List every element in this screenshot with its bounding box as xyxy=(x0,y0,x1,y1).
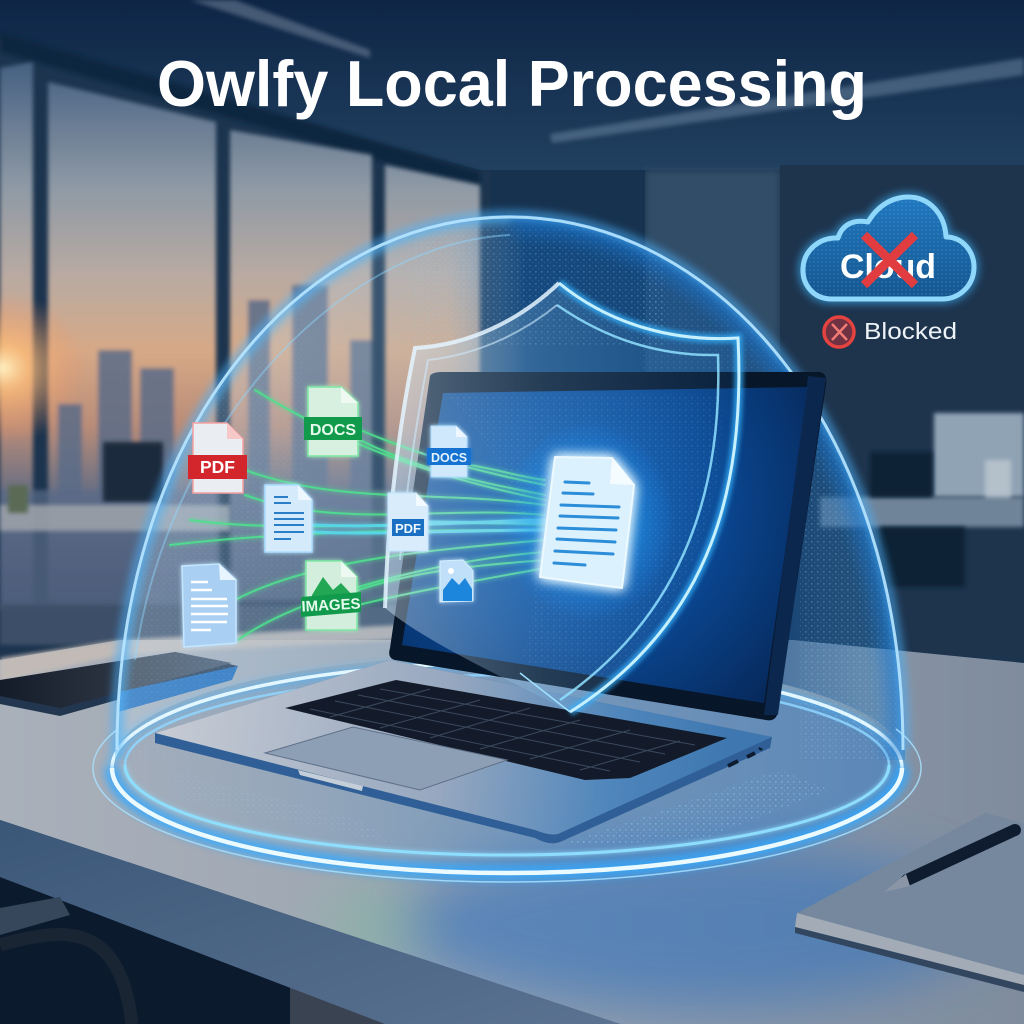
blocked status label xyxy=(824,317,957,347)
side ports xyxy=(728,748,761,766)
laptop xyxy=(155,372,826,843)
shield xyxy=(385,283,739,712)
blocked cloud icon xyxy=(803,197,974,299)
laptop base xyxy=(155,660,772,843)
data streams xyxy=(170,390,548,640)
file icon: red PDF xyxy=(188,423,247,493)
file icon: blue image xyxy=(440,560,473,602)
tablet on desk xyxy=(0,652,238,716)
front arc of the glowing ring xyxy=(93,729,921,882)
file icon: blue PDF xyxy=(388,493,428,551)
file icon: green IMAGES xyxy=(301,561,361,630)
file icon: text page lower left xyxy=(182,564,236,647)
blocked status label: Blocked xyxy=(864,318,957,344)
central glowing document xyxy=(500,422,676,622)
file icon: green IMAGES: IMAGES xyxy=(301,595,361,616)
keyboard xyxy=(285,680,727,780)
trackpad xyxy=(265,727,507,790)
protective dome xyxy=(115,215,910,775)
desk xyxy=(0,625,1024,1024)
file icon: green DOCS: DOCS xyxy=(310,422,356,439)
file icon: blue PDF: PDF xyxy=(395,521,421,536)
back arc of the glowing ring xyxy=(112,663,902,873)
file icon: blue DOCS: DOCS xyxy=(431,451,467,465)
blocked cloud icon: Cloud xyxy=(840,248,936,286)
file icon: blue DOCS xyxy=(427,426,471,477)
title: Owlfy Local Processing xyxy=(157,47,867,120)
file icon: text page middle left xyxy=(265,485,312,552)
notebook and pen xyxy=(795,813,1024,992)
laptop screen xyxy=(389,372,826,720)
dome reflection on desk xyxy=(112,663,902,873)
file icon: red PDF: PDF xyxy=(200,457,235,477)
file icon: green DOCS xyxy=(304,387,362,456)
